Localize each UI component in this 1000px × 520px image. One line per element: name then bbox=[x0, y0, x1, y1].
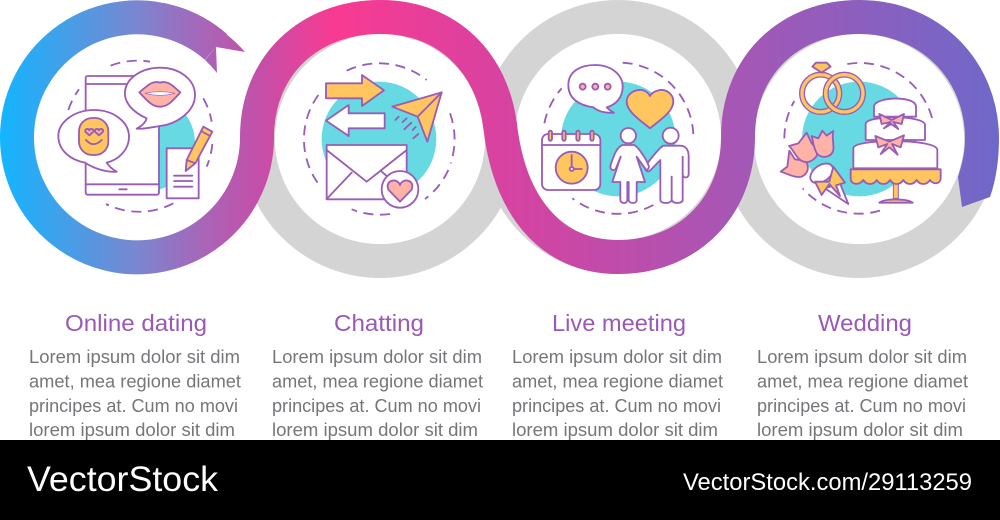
text block: wedding bbox=[757, 347, 968, 440]
heading: live meeting: Live meeting bbox=[552, 310, 686, 336]
text block: online dating: Lorem ipsum dolor sit dim bbox=[29, 347, 240, 367]
text block: online dating: lorem ipsum dolor sit dim bbox=[29, 420, 235, 440]
text block: online dating bbox=[29, 347, 241, 440]
icon: online dating bbox=[58, 61, 212, 212]
text block: chatting: Lorem ipsum dolor sit dim bbox=[272, 347, 482, 367]
footer bar bbox=[0, 440, 1000, 520]
text block: chatting: principes at. Cum no movi bbox=[272, 396, 481, 416]
text block: wedding: principes at. Cum no movi bbox=[757, 396, 966, 416]
text block: online dating: amet, mea regione diamet bbox=[29, 372, 241, 392]
text block: wedding: amet, mea regione diamet bbox=[757, 372, 968, 392]
footer bar: VectorStock.com/29113259 bbox=[683, 469, 972, 496]
text block: live meeting: Lorem ipsum dolor sit dim bbox=[512, 347, 722, 367]
footer bar: VectorStock bbox=[27, 460, 219, 499]
white circle backgrounds bbox=[34, 34, 964, 244]
heading: chatting: Chatting bbox=[334, 310, 424, 336]
text block: live meeting bbox=[512, 347, 723, 440]
text block: chatting: amet, mea regione diamet bbox=[272, 372, 483, 392]
gradient ribbon with arrow ends bbox=[17, 17, 999, 257]
icon: wedding bbox=[781, 63, 941, 214]
text block: live meeting: amet, mea regione diamet bbox=[512, 372, 723, 392]
text block: wedding: lorem ipsum dolor sit dim bbox=[757, 420, 963, 440]
text block: live meeting: principes at. Cum no movi bbox=[512, 396, 721, 416]
text block: chatting bbox=[272, 347, 483, 440]
text block: live meeting: lorem ipsum dolor sit dim bbox=[512, 420, 718, 440]
text block: chatting: lorem ipsum dolor sit dim bbox=[272, 420, 478, 440]
icon: chatting bbox=[304, 63, 455, 215]
text block: wedding: Lorem ipsum dolor sit dim bbox=[757, 347, 967, 367]
heading: wedding: Wedding bbox=[818, 310, 912, 336]
gray rings behind the ribbon bbox=[258, 17, 981, 261]
icon: live meeting bbox=[542, 63, 693, 214]
text block: online dating: principes at. Cum no movi bbox=[29, 396, 238, 416]
heading: online dating: Online dating bbox=[65, 310, 207, 336]
